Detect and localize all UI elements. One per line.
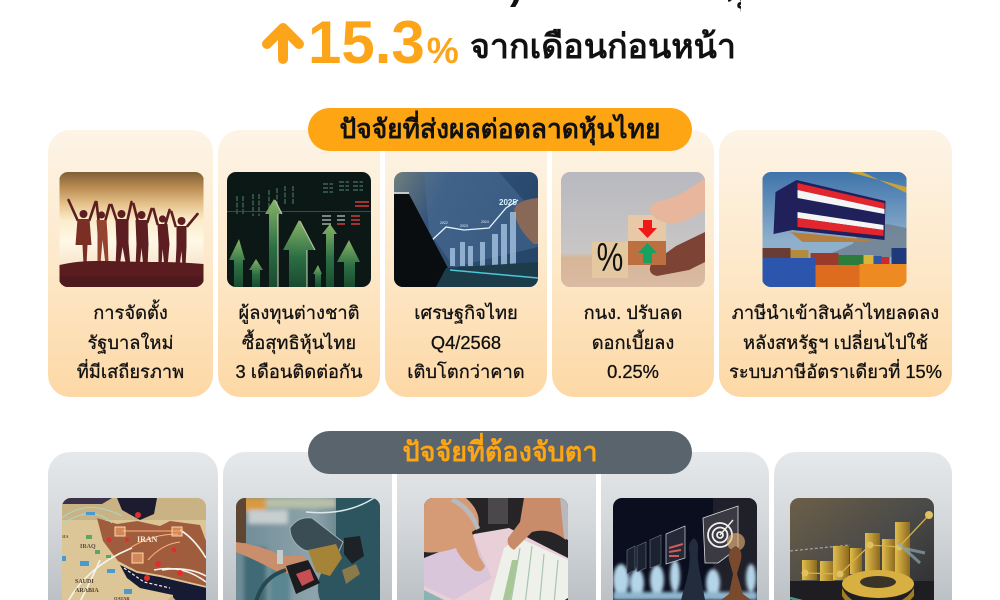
label text: การจัดตั้ง — [93, 302, 168, 323]
photo: map of Iran: IRAQ — [80, 544, 96, 550]
label text: ระบบภาษีอัตราเดียวที่ 15% — [729, 361, 942, 382]
photo: map of Iran: ARABIA — [75, 588, 99, 594]
photo: refuelling a car — [236, 498, 380, 600]
heading pill: factors to watch — [308, 431, 692, 474]
photo: percent blocks with arrows — [561, 172, 705, 287]
photo: laptop with growth chart: 2022 — [440, 221, 448, 225]
panel: factor 3, Thai economy — [385, 130, 547, 397]
label text: 3 เดือนติดต่อกัน — [235, 361, 362, 382]
label text: เติบโตกว่าคาด — [407, 361, 525, 382]
label text: 0.25% — [607, 361, 659, 382]
photo: laptop with growth chart: 2025 — [499, 198, 517, 207]
panel: watch factor 3, baht currency — [397, 452, 596, 600]
label text: Q4/2568 — [431, 332, 501, 352]
photo: map of Iran: SAUDI — [75, 579, 94, 585]
label text — [584, 302, 682, 382]
panel: watch factor 2, oil price — [223, 452, 392, 600]
heading pill: factors affecting Thai stocks: ปัจจัยที่ส่งผลต่อตลาดหุ้นไทย — [340, 114, 660, 144]
label text — [77, 299, 184, 382]
headline: 15.3% change — [262, 9, 736, 76]
label text: รัฐบาลใหม่ — [87, 332, 174, 352]
panel: factor 5, US tariff — [719, 130, 952, 397]
icon: up arrow — [262, 23, 304, 64]
panel: factor 1, new government — [48, 130, 213, 397]
label text: ซื้อสุทธิหุ้นไทย — [242, 332, 356, 352]
panel: factor 4, interest rate — [552, 130, 714, 397]
photo: laptop with growth chart — [394, 172, 538, 287]
panel: factor 2, foreign investors — [218, 130, 380, 397]
label text: เศรษฐกิจไทย — [414, 302, 518, 323]
photo: green arrows on stock board — [227, 172, 371, 287]
heading pill: factors to watch: ปัจจัยที่ต้องจับตา — [402, 437, 598, 467]
label text: ดอกเบี้ยลง — [592, 332, 674, 352]
photo: chess pieces and target — [613, 498, 757, 600]
headline fragment clipped by page top — [510, 0, 741, 12]
panel: watch factor 1, Iran conflict — [48, 452, 218, 600]
photo: people silhouettes at sunset — [60, 172, 204, 287]
photo: laptop with growth chart: 2024 — [481, 220, 489, 224]
label text — [407, 302, 525, 382]
photo: map of Iran — [62, 498, 206, 600]
panel: watch factor 4, strategy — [601, 452, 769, 600]
heading pill: factors affecting Thai stocks — [308, 108, 692, 151]
panel: watch factor 5, gold and investment — [774, 452, 952, 600]
label text: กนง. ปรับลด — [584, 302, 682, 323]
photo: hands counting banknotes — [424, 498, 568, 600]
photo: container with Thai flag — [762, 172, 906, 287]
label text: ผู้ลงทุนต่างชาติ — [238, 302, 360, 323]
value 15.3 percent: 15.3% — [308, 9, 459, 76]
caption: from the previous month: จากเดือนก่อนหน้า — [470, 28, 736, 66]
photo: laptop with growth chart: 2023 — [460, 224, 468, 228]
photo: map of Iran: IRAN — [137, 535, 158, 544]
photo: gold bars and dollar ring — [790, 498, 934, 600]
label text — [235, 302, 362, 382]
label text: ที่มีเสถียรภาพ — [77, 361, 184, 382]
photo: percent blocks with arrows: % — [597, 236, 623, 280]
label text: หลังสหรัฐฯ เปลี่ยนไปใช้ — [743, 332, 928, 352]
label text — [729, 302, 942, 382]
label text: ภาษีนำเข้าสินค้าไทยลดลง — [732, 302, 939, 323]
